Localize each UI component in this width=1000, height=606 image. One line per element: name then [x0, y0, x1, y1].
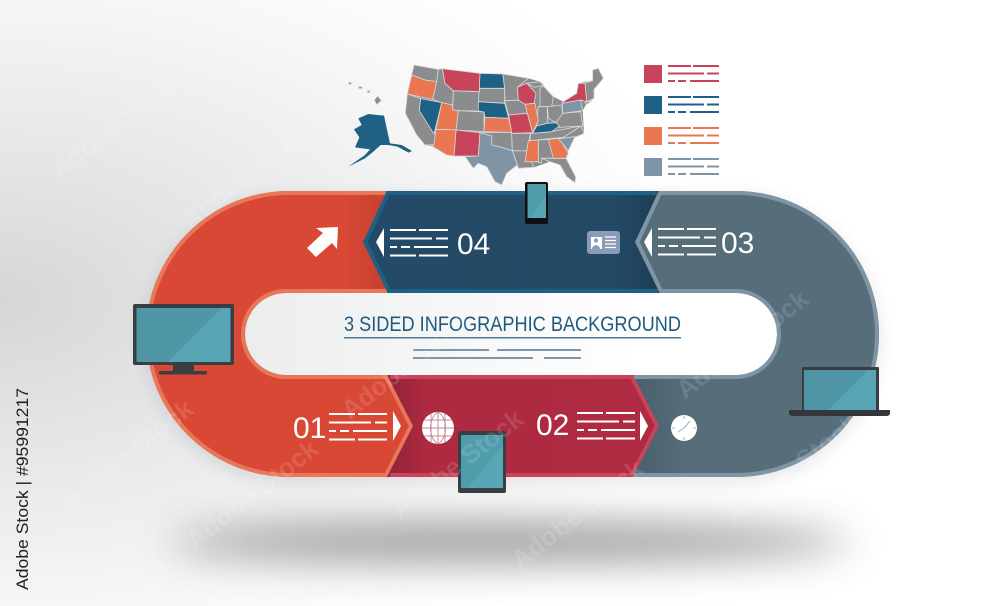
- map base states in grey: [349, 65, 603, 183]
- legend item blue: [644, 96, 719, 114]
- watermarks: Adobe Stock: [335, 303, 479, 425]
- watermarks: Adobe Stock: [720, 408, 864, 530]
- block 04: 04: [457, 228, 490, 261]
- US map: [348, 65, 603, 185]
- block 01: 01: [293, 412, 326, 445]
- device: phone: [525, 182, 548, 224]
- device: tablet: [458, 431, 506, 493]
- watermarks: Adobe Stock: [670, 283, 814, 405]
- segment: blue 04: [363, 191, 660, 293]
- floor shadow: [170, 522, 850, 562]
- segment: red 01: [146, 191, 413, 477]
- icon: globe: [422, 412, 454, 444]
- map silhouette: [405, 65, 603, 185]
- watermarks: Adobe Stock: [175, 113, 319, 235]
- stock id side text: Adobe Stock | #95991217: [13, 388, 32, 590]
- center sub-text lines: [413, 350, 581, 358]
- icon: arrow: [307, 227, 338, 257]
- icon: clock: [671, 415, 697, 441]
- watermarks: Adobe Stock: [180, 433, 324, 555]
- block 02: [536, 409, 648, 442]
- device: monitor: [133, 304, 234, 374]
- legend item crimson: [644, 65, 719, 83]
- block 03: [644, 227, 754, 260]
- watermarks: Adobe Stock: [845, 453, 989, 575]
- legend: [644, 65, 719, 176]
- segment: crimson 02: [387, 375, 659, 477]
- watermarks: Adobe Stock: [45, 63, 189, 185]
- icon: id card: [587, 231, 620, 254]
- ring soft shadow: [146, 196, 879, 482]
- map blue-grey states: [465, 100, 583, 185]
- watermarks: Adobe Stock: [710, 63, 854, 185]
- block 03: 03: [721, 227, 754, 260]
- segment: grey 03: [633, 191, 879, 477]
- block 01: [293, 411, 401, 445]
- watermarks: Adobe Stock: [835, 118, 979, 240]
- watermarks: Adobe Stock: [55, 393, 199, 515]
- block 04: [376, 228, 490, 261]
- device: laptop: [789, 367, 890, 416]
- watermarks: Adobe Stock: [385, 403, 529, 525]
- map orange states: [407, 75, 568, 162]
- block 02: 02: [536, 409, 569, 442]
- center pill: [245, 293, 777, 375]
- map blue states: [348, 73, 559, 167]
- map crimson states: [442, 69, 592, 156]
- center title: 3 SIDED INFOGRAPHIC BACKGROUND: [344, 313, 681, 336]
- watermarks: Adobe Stock: [505, 453, 649, 575]
- legend item grey: [644, 158, 719, 176]
- legend item orange: [644, 127, 719, 145]
